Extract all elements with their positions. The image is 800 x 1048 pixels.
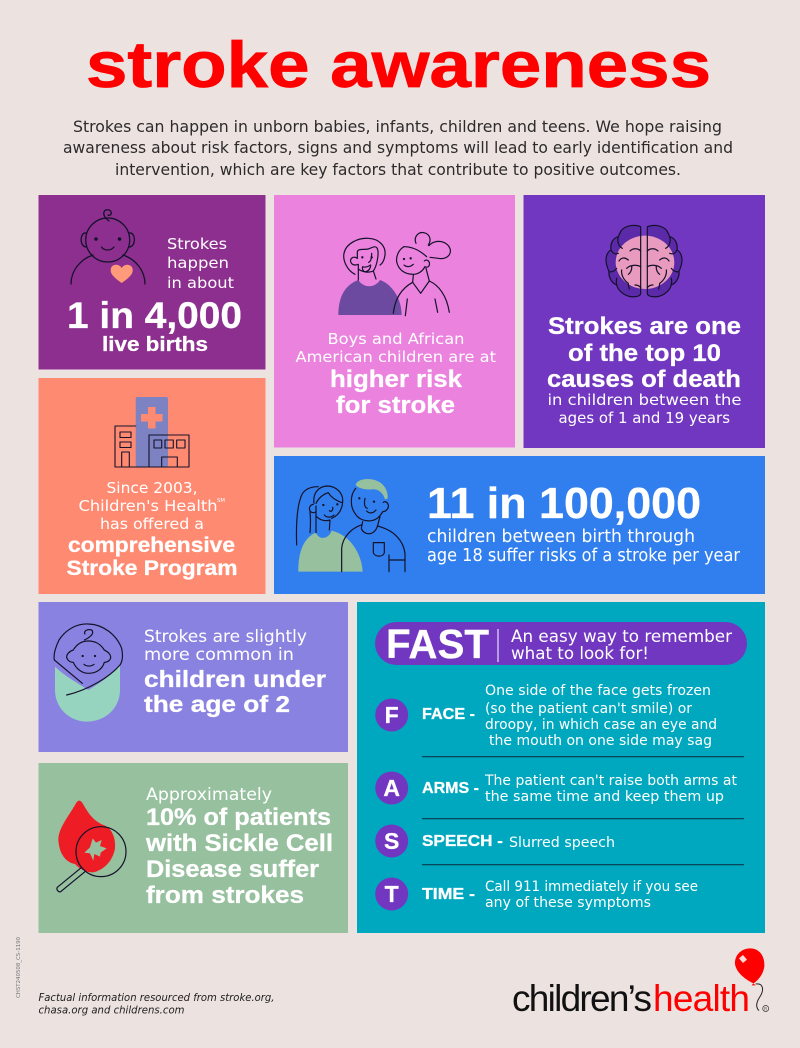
text: approximately: Approximately bbox=[146, 785, 272, 805]
row: face: One side of the face gets frozen bbox=[485, 683, 711, 699]
row: arms: The patient can't raise both arms at bbox=[484, 773, 737, 789]
intro text: awareness about risk factors, signs and symptoms will lead to early identification and bbox=[63, 138, 733, 157]
text: strokes happen in about: Strokes bbox=[167, 235, 227, 253]
row: time bbox=[375, 878, 698, 911]
panel: 1 in 4,000 live births bbox=[38, 195, 266, 370]
row: face: the mouth on one side may sag bbox=[489, 733, 712, 749]
document code: CHST240508_CS-1190 bbox=[16, 937, 22, 998]
row: speech: SPEECH - bbox=[422, 833, 503, 850]
row: time: any of these symptoms bbox=[485, 895, 651, 911]
row: time: TIME - bbox=[422, 886, 475, 903]
row: time: Call 911 immediately if you see bbox=[485, 879, 698, 895]
logo: children's health: R bbox=[764, 1006, 767, 1012]
row: face: FACE - bbox=[422, 706, 475, 723]
icon: baby with heart bbox=[71, 210, 145, 284]
text: higher risk for stroke: for stroke bbox=[336, 392, 455, 419]
text: since 2003 bbox=[78, 479, 225, 533]
row: speech bbox=[375, 824, 615, 858]
text: since 2003: Since 2003, bbox=[106, 479, 198, 497]
logo: children's health: health bbox=[653, 978, 750, 1019]
text: 10% of patients with sickle cell disease: with Sickle Cell bbox=[145, 830, 333, 857]
panel: 11 in 100,000 bbox=[274, 456, 765, 594]
text: boys and african american children: American children are at bbox=[296, 348, 496, 366]
text: since 2003: has offered a bbox=[100, 515, 204, 533]
row: time: T bbox=[385, 881, 399, 907]
text: 10% of patients with sickle cell disease: 10% of patients bbox=[146, 804, 331, 831]
text: 10% of patients with sickle cell disease bbox=[145, 804, 333, 909]
text: boys and african american children: Boys and African bbox=[328, 330, 464, 348]
FAST header pill: An easy way to remember bbox=[511, 627, 732, 647]
text: strokes are slightly more common: Strokes are slightly bbox=[144, 627, 307, 646]
text: live births: live births bbox=[102, 334, 208, 356]
icon: brain bbox=[606, 225, 682, 297]
row: arms bbox=[375, 772, 737, 805]
text: comprehensive stroke program: comprehensive bbox=[68, 533, 235, 557]
panel: top 10 causes of death bbox=[524, 195, 765, 448]
FAST header pill: FAST bbox=[386, 621, 489, 667]
text: in children between ages bbox=[548, 391, 742, 427]
text: strokes happen in about: happen bbox=[167, 254, 229, 272]
row: speech: Slurred speech bbox=[509, 835, 615, 851]
text: 10% of patients with sickle cell disease: from strokes bbox=[146, 882, 304, 909]
text: strokes are one of the top 10 causes of death bbox=[547, 313, 741, 393]
text: since 2003: SM bbox=[217, 498, 225, 504]
text: strokes happen in about: in about bbox=[167, 274, 234, 292]
panel: sickle cell disease bbox=[38, 763, 348, 933]
panel: higher risk for stroke bbox=[274, 195, 515, 448]
stat: 1 in 4,000: 1 in 4,000 bbox=[67, 295, 242, 336]
row: face: (so the patient can't smile) or bbox=[485, 701, 692, 717]
intro text: intervention, which are key factors that contribute to positive outcomes. bbox=[115, 160, 681, 179]
icon: blood drop with magnifier bbox=[57, 801, 126, 892]
text: children between birth through age 18: children between birth through bbox=[427, 527, 695, 547]
text: higher risk for stroke bbox=[330, 366, 462, 419]
text: strokes are one of the top 10 causes of death: causes of death bbox=[547, 366, 741, 393]
source note: chasa.org and childrens.com bbox=[38, 1004, 184, 1016]
text: strokes happen in about bbox=[167, 235, 234, 292]
icon: swaddled baby bbox=[54, 624, 122, 722]
text: boys and african american children bbox=[296, 330, 496, 366]
source note: Factual information resourced from stroke.org, bbox=[38, 992, 274, 1004]
text: comprehensive stroke program bbox=[66, 533, 237, 580]
text: strokes are one of the top 10 causes of death: of the top 10 bbox=[568, 340, 721, 367]
text: 10% of patients with sickle cell disease: Disease suffer bbox=[146, 856, 319, 883]
text: higher risk for stroke: higher risk bbox=[330, 366, 462, 393]
text: in children between ages: in children between the bbox=[548, 391, 742, 409]
row: speech: S bbox=[384, 828, 399, 854]
row: face bbox=[375, 683, 717, 749]
text: children between birth through age 18 bbox=[427, 527, 741, 566]
logo: children's health: children’s bbox=[512, 978, 652, 1019]
row: face: droopy, in which case an eye and bbox=[485, 717, 717, 733]
source note bbox=[38, 992, 274, 1016]
row: arms: A bbox=[383, 775, 400, 801]
text: children under the age of 2 bbox=[144, 666, 326, 717]
text: children between birth through age 18: age 18 suffer risks of a stroke per year bbox=[427, 546, 741, 566]
panel: FAST bbox=[357, 602, 765, 933]
text: strokes are one of the top 10 causes of death: Strokes are one bbox=[548, 313, 741, 340]
stat: 11 in 100,000: 11 in 100,000 bbox=[427, 479, 701, 528]
icon: woman and man bbox=[296, 479, 405, 572]
logo: children's health bbox=[512, 948, 769, 1019]
text: comprehensive stroke program: Stroke Program bbox=[66, 556, 237, 580]
icon: boy and girl bbox=[338, 233, 450, 316]
text: strokes are slightly more common bbox=[144, 627, 307, 664]
text: children under the age of 2: children under bbox=[144, 666, 326, 692]
row: arms: the same time and keep them up bbox=[485, 789, 724, 805]
text: strokes are slightly more common: more common in bbox=[144, 645, 294, 664]
icon: hospital bbox=[115, 397, 189, 467]
title: stroke awareness bbox=[86, 28, 711, 101]
row: arms: ARMS - bbox=[422, 780, 479, 797]
text: in children between ages: ages of 1 and 19 years bbox=[558, 409, 730, 427]
text: since 2003: Children's Health bbox=[78, 497, 218, 515]
panel: comprehensive stroke program bbox=[38, 378, 266, 594]
text: children under the age of 2: the age of 2 bbox=[144, 691, 290, 717]
FAST header pill bbox=[375, 621, 747, 667]
intro text: Strokes can happen in unborn babies, infants, children and teens. We hope raising bbox=[73, 117, 722, 136]
FAST header pill: what to look for! bbox=[511, 644, 649, 664]
intro text bbox=[63, 117, 733, 179]
row: face: F bbox=[385, 702, 399, 728]
panel: children under the age of 2 bbox=[38, 602, 348, 752]
